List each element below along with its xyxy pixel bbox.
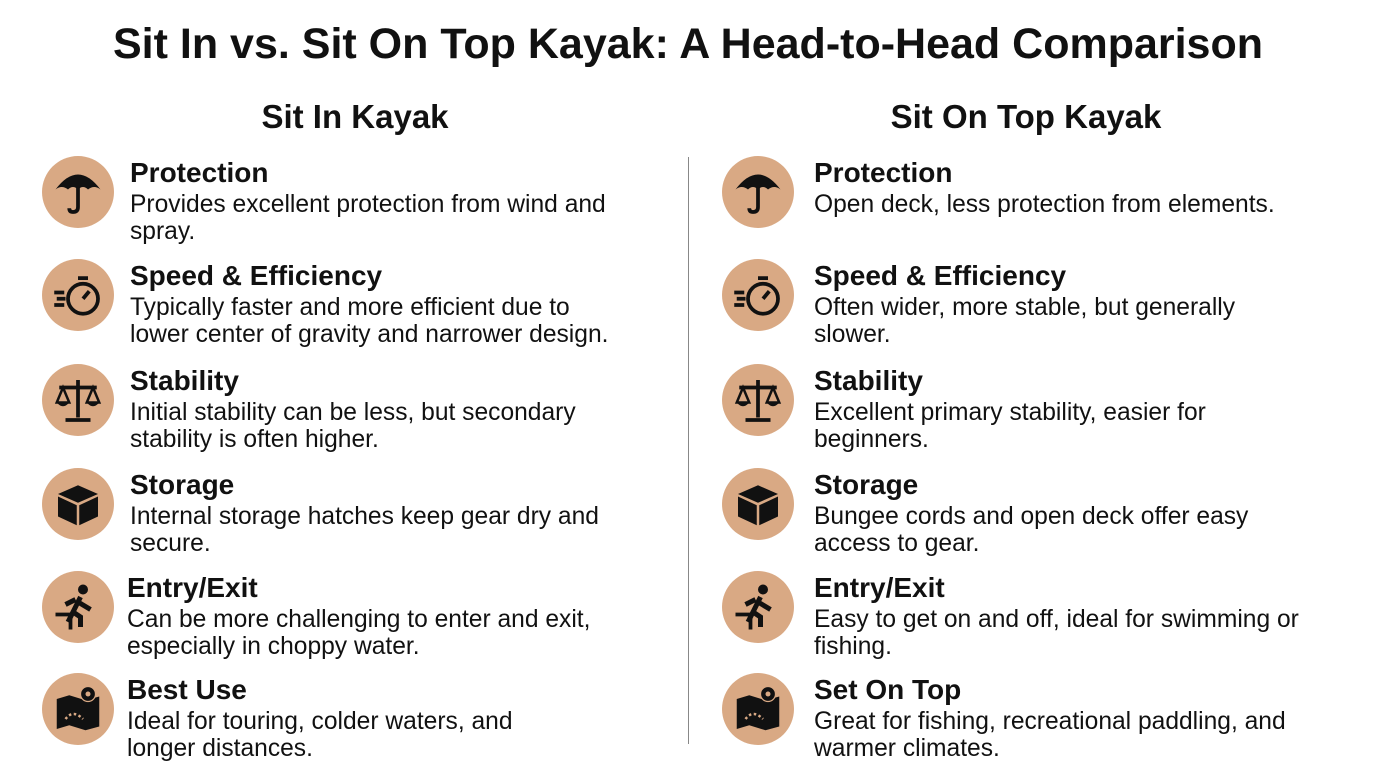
item: left storage <box>42 468 599 557</box>
item: left stability: Stability <box>130 365 239 396</box>
item: left stability <box>42 364 576 453</box>
item: left speed: Typically faster and more efficient due to <box>130 294 570 321</box>
item: left entry: Can be more challenging to enter and exit, <box>127 606 590 633</box>
icon: umbrella <box>42 156 114 228</box>
item: right storage: access to gear. <box>814 530 979 557</box>
item: left best use <box>42 673 513 762</box>
item: left entry <box>42 571 590 660</box>
item: right entry: Entry/Exit <box>814 572 945 603</box>
icon: person stepping <box>42 571 114 643</box>
item: left stability: stability is often higher. <box>130 426 379 453</box>
heading: sit on top: Sit On Top Kayak <box>891 98 1161 135</box>
item: right protection <box>722 156 1275 228</box>
item: left stability: Initial stability can be less, but secondary <box>130 399 576 426</box>
item: right speed <box>722 259 1235 348</box>
icon: person stepping <box>722 571 794 643</box>
icon: scale <box>42 364 114 436</box>
item: left speed <box>42 259 608 348</box>
item: right set on top: Set On Top <box>814 674 961 705</box>
icon: scale <box>722 364 794 436</box>
item: left best use: Ideal for touring, colder waters, and <box>127 708 513 735</box>
item: left protection: spray. <box>130 218 195 245</box>
item: right speed: slower. <box>814 321 891 348</box>
item: right entry <box>722 571 1299 660</box>
item: right stability <box>722 364 1206 453</box>
item: left best use: longer distances. <box>127 735 313 762</box>
item: right storage: Storage <box>814 469 918 500</box>
item: left speed: Speed & Efficiency <box>130 260 382 291</box>
item: right stability: beginners. <box>814 426 929 453</box>
item: right set on top <box>722 673 1286 762</box>
item: left storage: secure. <box>130 530 211 557</box>
icon: box <box>722 468 794 540</box>
item: right stability: Stability <box>814 365 923 396</box>
item: right entry: Easy to get on and off, ideal for swimming or <box>814 606 1299 633</box>
heading: sit in: Sit In Kayak <box>261 98 449 135</box>
item: right protection: Open deck, less protection from elements. <box>814 191 1275 218</box>
icon: stopwatch <box>722 259 794 331</box>
item: left best use: Best Use <box>127 674 247 705</box>
item: right entry: fishing. <box>814 633 892 660</box>
item: right speed: Often wider, more stable, but generally <box>814 294 1235 321</box>
item: left entry: especially in choppy water. <box>127 633 420 660</box>
item: right storage <box>722 468 1248 557</box>
item: right speed: Speed & Efficiency <box>814 260 1066 291</box>
title: Sit In vs. Sit On Top Kayak: A Head-to-Head Comparison <box>113 20 1263 68</box>
icon: map <box>722 673 794 745</box>
item: right protection: Protection <box>814 157 952 188</box>
item: left entry: Entry/Exit <box>127 572 258 603</box>
item: left speed: lower center of gravity and narrower design. <box>130 321 608 348</box>
item: left storage: Storage <box>130 469 234 500</box>
item: left protection: Protection <box>130 157 268 188</box>
icon: box <box>42 468 114 540</box>
item: right stability: Excellent primary stability, easier for <box>814 399 1206 426</box>
item: right storage: Bungee cords and open deck offer easy <box>814 503 1248 530</box>
item: right set on top: Great for fishing, recreational paddling, and <box>814 708 1286 735</box>
item: left storage: Internal storage hatches keep gear dry and <box>130 503 599 530</box>
icon: stopwatch <box>42 259 114 331</box>
item: left protection: Provides excellent protection from wind and <box>130 191 606 218</box>
icon: umbrella <box>722 156 794 228</box>
icon: map <box>42 673 114 745</box>
item: right set on top: warmer climates. <box>814 735 1000 762</box>
item: left protection <box>42 156 606 245</box>
